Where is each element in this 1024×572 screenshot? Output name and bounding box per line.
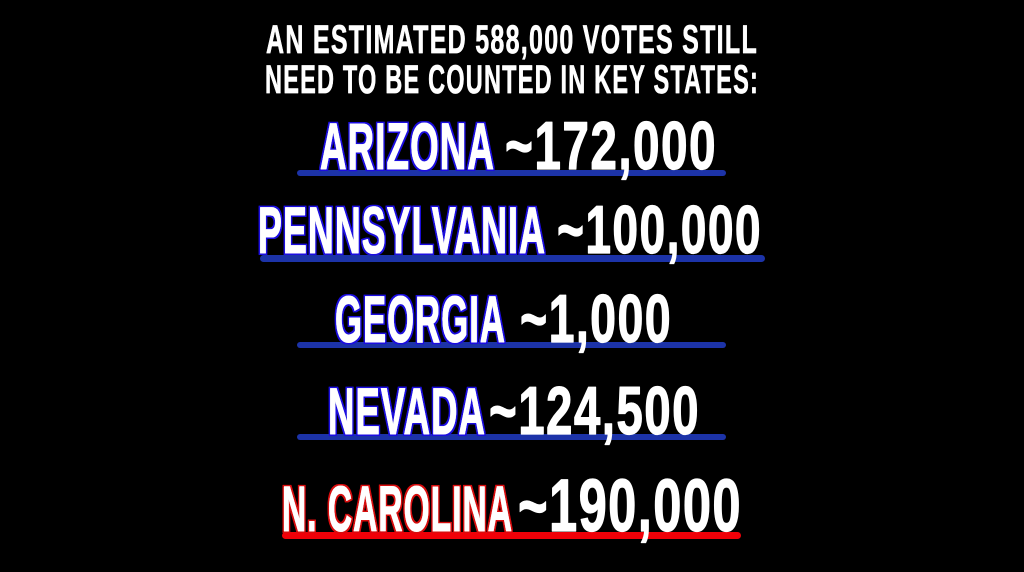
title: AN ESTIMATED 588,000 VOTES STILL bbox=[266, 18, 758, 62]
row: Pennsylvania: ~100,000 bbox=[557, 192, 762, 268]
row: Georgia: GEORGIA bbox=[335, 282, 506, 356]
row: Nevada bbox=[297, 373, 726, 449]
row: Arizona: ARIZONA bbox=[320, 109, 495, 183]
row: Georgia: ~1,000 bbox=[520, 281, 672, 357]
row: Nevada: NEVADA bbox=[328, 374, 486, 448]
row: North Carolina: ~190,000 bbox=[518, 464, 742, 547]
row: Nevada: ~124,500 bbox=[489, 373, 700, 449]
row: North Carolina: N. CAROLINA bbox=[282, 473, 513, 545]
row: Pennsylvania: PENNSYLVANIA bbox=[258, 193, 546, 267]
title bbox=[265, 18, 759, 102]
row: Arizona: ~172,000 bbox=[505, 108, 717, 184]
